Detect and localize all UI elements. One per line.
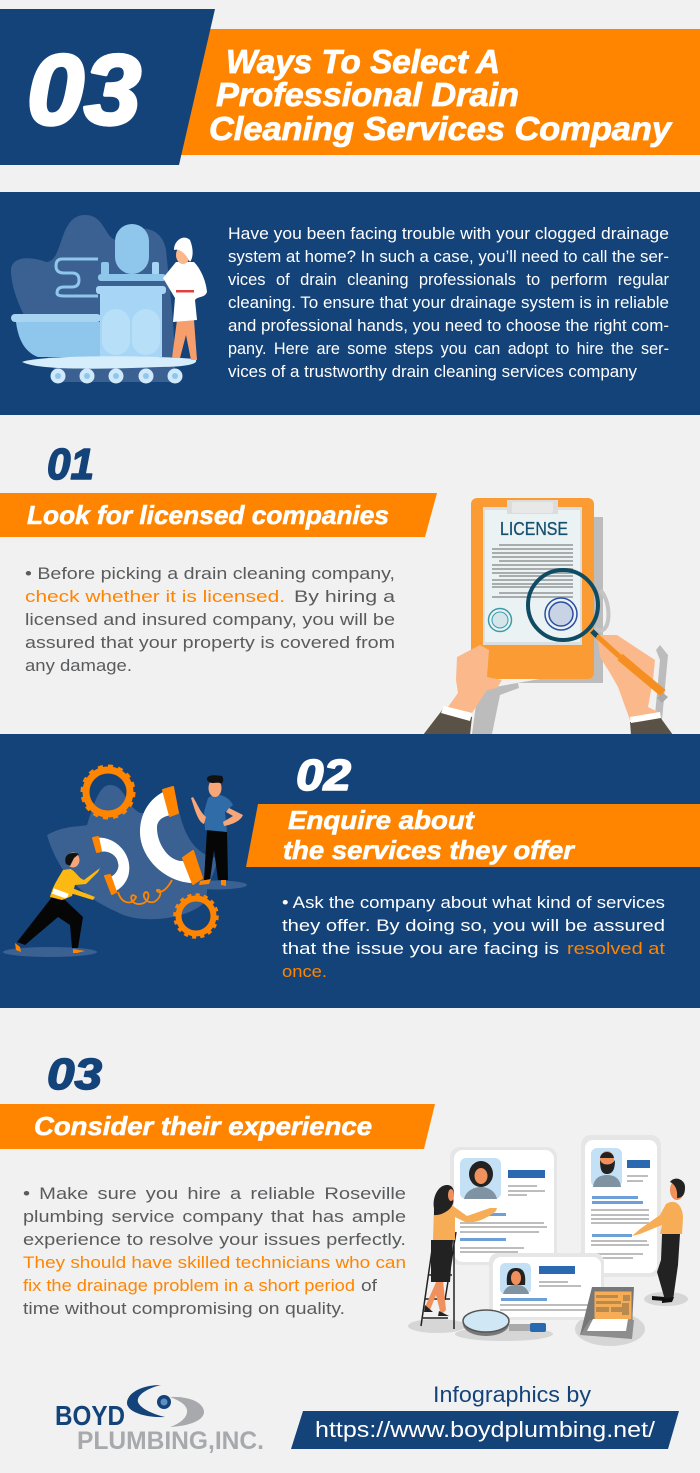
body text: time without compromising on quality.	[23, 1299, 345, 1318]
resume card centre	[489, 1253, 604, 1320]
Boyd Plumbing logo: BOYD	[55, 1400, 125, 1431]
intro text: pany. Here are some steps you can adopt to hire the ser-	[228, 339, 669, 358]
illustration: resumes and recruiters	[408, 1135, 688, 1346]
heading bar: Enquire about	[288, 805, 475, 835]
body text: that the issue you are facing is	[282, 939, 559, 958]
heading bar	[0, 493, 437, 537]
body text: resolved at	[567, 939, 665, 958]
body text: assured that your property is covered from	[25, 633, 395, 652]
Boyd Plumbing logo	[55, 1385, 264, 1455]
body text	[25, 564, 396, 675]
body text: they offer. By doing so, you will be assured	[282, 916, 665, 935]
credit: Infographics by	[433, 1382, 591, 1407]
url banner	[291, 1411, 679, 1449]
intro text: system at home? In such a case, you’ll need to call the ser-	[228, 247, 669, 266]
illustration: telephone and workers	[3, 766, 247, 957]
body text: They should have skilled technicians who can	[23, 1253, 406, 1272]
intro text	[228, 224, 669, 381]
heading bar	[246, 804, 700, 867]
illustration: bathroom	[11, 215, 207, 384]
section 1	[0, 440, 673, 735]
heading bar: Consider their experience	[34, 1111, 372, 1141]
number 01: 01	[47, 440, 94, 489]
body text: experience to resolve your issues perfectly.	[23, 1230, 406, 1249]
body text: fix the drainage problem in a short period	[23, 1276, 355, 1295]
heading bar	[0, 1104, 435, 1149]
Boyd Plumbing logo: PLUMBING,INC.	[77, 1427, 264, 1455]
intro text: vices of drain cleaning professionals to perform regular	[228, 270, 669, 289]
body text: licensed and insured company, you will be	[25, 610, 395, 629]
body text	[23, 1184, 406, 1318]
orange title band	[181, 29, 700, 155]
body text: check whether it is licensed.	[25, 587, 285, 606]
magnifier	[463, 1310, 546, 1336]
url banner: https://www.boydplumbing.net/	[315, 1417, 656, 1442]
intro text: and professional hands, you need to choose the right com-	[228, 316, 669, 335]
navy number block	[0, 9, 215, 165]
title: Professional Drain	[216, 76, 519, 113]
title: Ways To Select A	[226, 43, 500, 80]
intro text: cleaning. To ensure that your drainage system is in reliable	[228, 293, 669, 312]
header banner	[0, 9, 700, 165]
resume card left	[450, 1147, 557, 1265]
number 03: 03	[47, 1050, 102, 1099]
body text: • Ask the company about what kind of services	[282, 893, 665, 912]
big number 03: 03	[27, 34, 141, 145]
body text: of	[361, 1276, 377, 1295]
panel: section 2	[0, 734, 700, 1008]
footer	[55, 1382, 679, 1455]
body text	[282, 893, 665, 981]
panel: introduction	[0, 192, 700, 415]
body text: • Make sure you hire a reliable Roseville	[23, 1184, 406, 1203]
title	[209, 43, 673, 147]
laptop	[580, 1287, 634, 1339]
illustration: license clipboard under magnifier	[423, 498, 673, 735]
heading bar: the services they offer	[283, 835, 576, 865]
heading bar: Look for licensed companies	[27, 500, 389, 530]
body text: once.	[282, 962, 327, 981]
intro text: vices of a trustworthy drain cleaning services company	[228, 362, 637, 381]
man pointing	[632, 1179, 685, 1303]
section 3	[0, 1050, 688, 1346]
illustration: license clipboard under magnifier: LICENSE	[500, 519, 568, 539]
body text: any damage.	[25, 656, 132, 675]
number 02: 02	[296, 751, 352, 800]
intro text: Have you been facing trouble with your clogged drainage	[228, 224, 669, 243]
body text: By hiring a	[294, 587, 396, 606]
resume card right	[581, 1135, 661, 1277]
body text: plumbing service company that has ample	[23, 1207, 406, 1226]
title: Cleaning Services Company	[209, 110, 673, 147]
woman on ladder	[421, 1185, 497, 1329]
body text: • Before picking a drain cleaning company,	[25, 564, 395, 583]
